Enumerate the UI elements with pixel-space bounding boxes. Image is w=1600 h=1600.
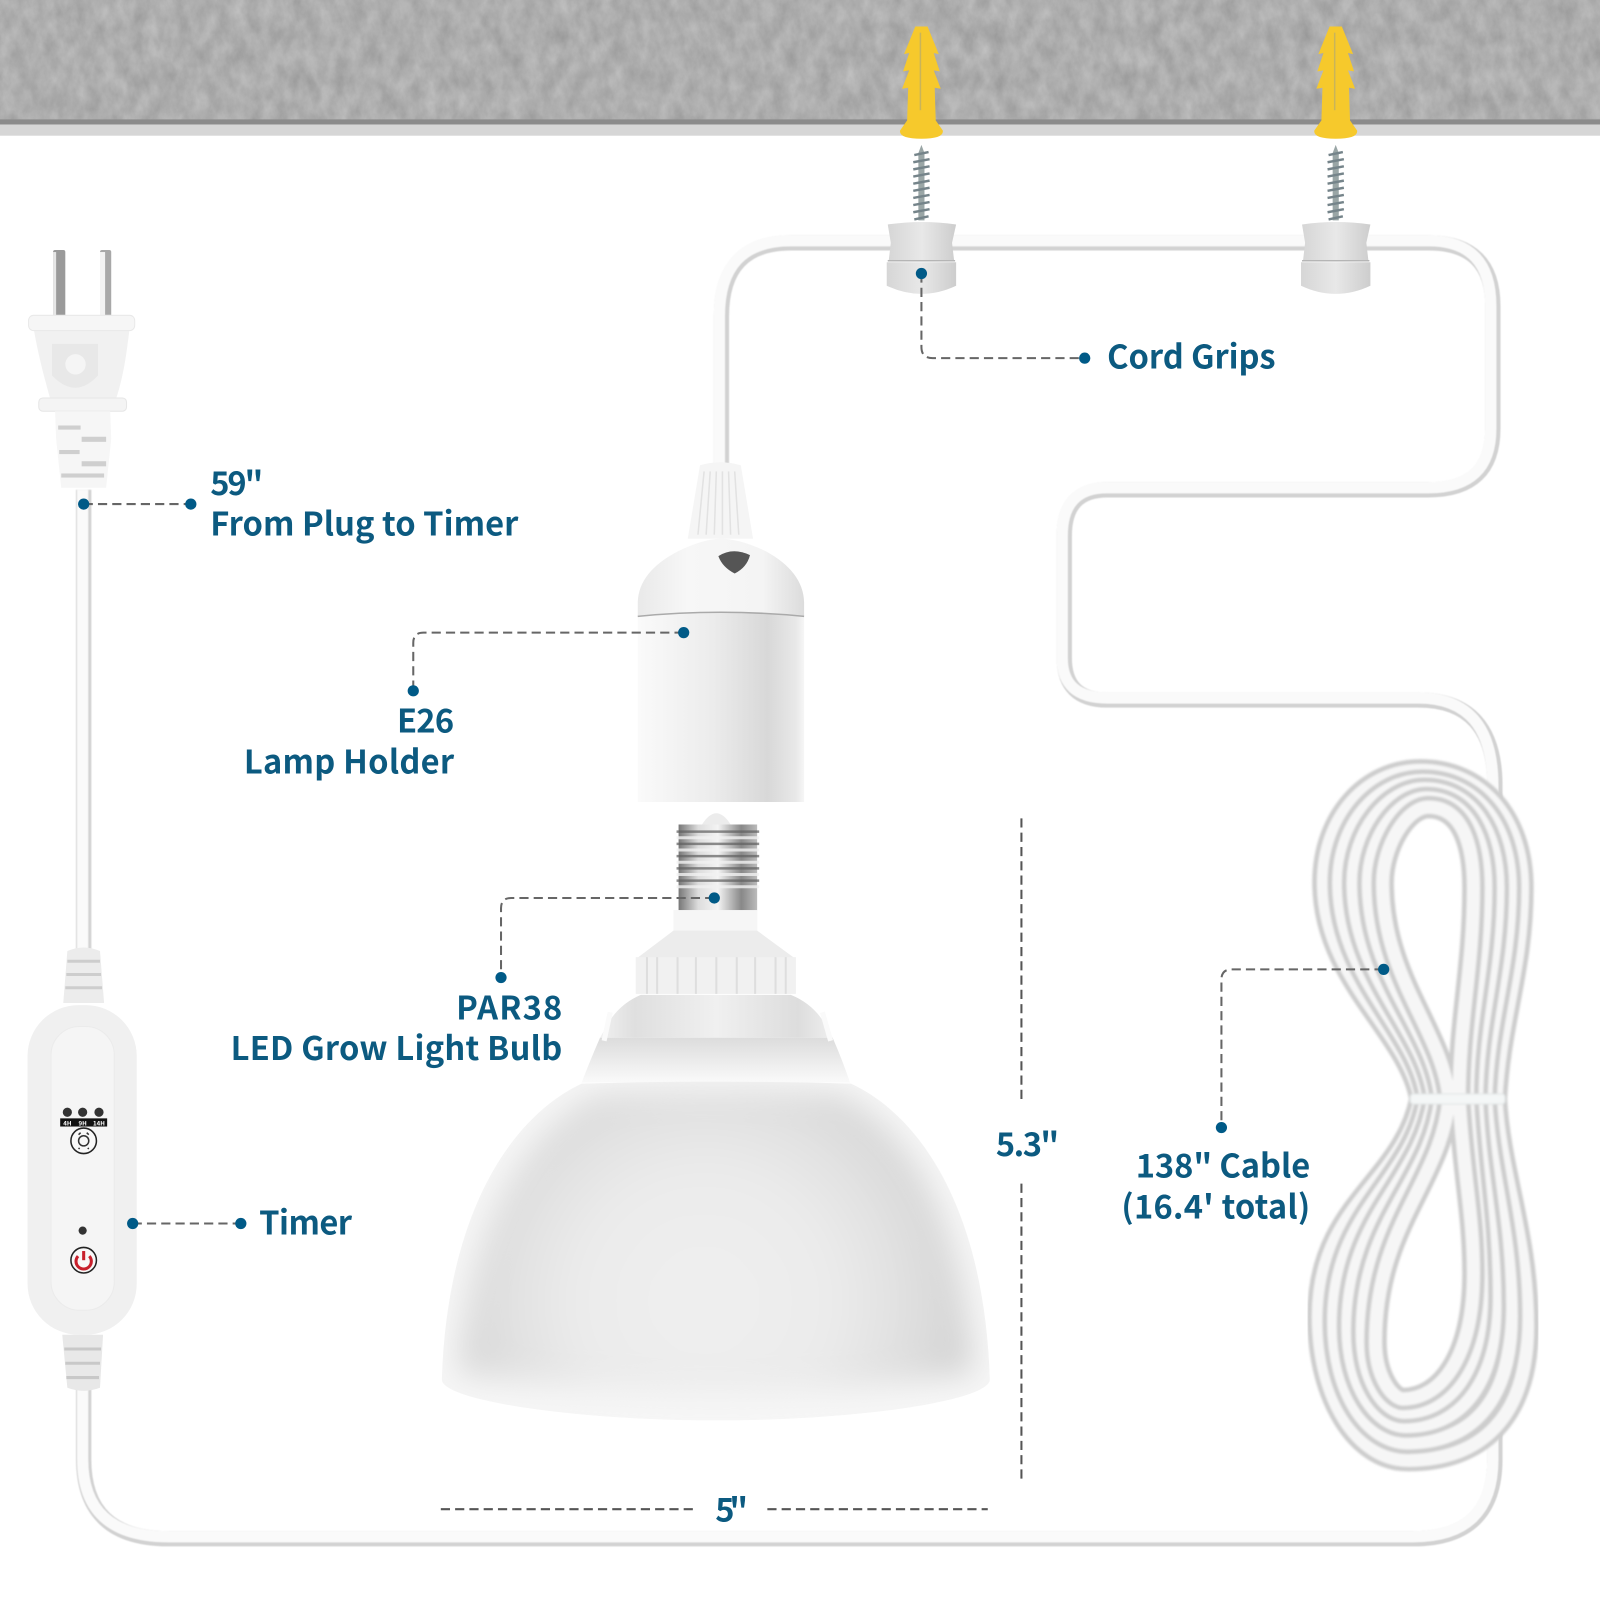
callout: from plug to timer: [78, 458, 519, 546]
lamp holder: [638, 462, 804, 802]
callout: E26 lamp holder: E26: [397, 696, 454, 743]
callout: timer: [127, 1198, 353, 1245]
callout: E26 lamp holder: Lamp Holder: [244, 736, 455, 783]
screw base: [677, 824, 759, 910]
timer hour labels: 14H: [93, 1119, 105, 1128]
coiled cable bundle: [1318, 770, 1528, 1460]
timer hour labels: 4H: [63, 1119, 72, 1128]
cord grip: left: [887, 222, 956, 294]
callout: cable length: [1121, 964, 1389, 1228]
collar: [636, 910, 796, 959]
timer strain relief: bottom: [62, 1335, 103, 1391]
wall anchor and screw: left: [900, 27, 943, 220]
power plug: [29, 250, 135, 488]
callout: from plug to timer: 59": [210, 458, 263, 505]
callout: cable length: (16.4' total): [1121, 1181, 1310, 1228]
callout: cable length: 138" Cable: [1136, 1141, 1310, 1188]
callout: timer: Timer: [259, 1198, 353, 1245]
cable hole: [718, 551, 750, 573]
timer hour labels: 9H: [79, 1119, 87, 1128]
ceiling: [0, 0, 1600, 136]
callout: cord grips: Cord Grips: [1107, 331, 1276, 378]
dimension: bulb height: 5.3": [996, 1119, 1059, 1166]
holder cap: [638, 539, 804, 616]
cord grip: right: [1301, 222, 1370, 294]
icon: power button: [71, 1247, 96, 1273]
LED bulb: [442, 813, 990, 1420]
bulb neck: [582, 995, 850, 1083]
callout: PAR38 bulb: PAR38: [456, 982, 562, 1029]
timer hour labels: [60, 1118, 107, 1128]
plug prongs: [53, 250, 111, 317]
timer controller: [28, 1005, 137, 1335]
timer strain relief: top: [63, 947, 104, 1003]
bulb dome: [442, 1082, 990, 1420]
strain relief cone: [688, 462, 753, 539]
main cable: plug to timer to bottom to coil: [83, 490, 1495, 1539]
upper cable routing: coil to lamp holder: [719, 241, 1495, 816]
timer indicator dots: [63, 1108, 104, 1117]
callout: cord grips: [916, 268, 1276, 378]
bulb tip: [702, 813, 731, 824]
callout: E26 lamp holder: [244, 627, 689, 783]
dimension: bulb width: 5": [715, 1484, 748, 1531]
ribbed ring: [636, 957, 796, 994]
callout: PAR38 bulb: [231, 892, 720, 1070]
callout: PAR38 bulb: LED Grow Light Bulb: [231, 1023, 562, 1070]
callout: from plug to timer: From Plug to Timer: [210, 499, 519, 546]
holder body: [638, 612, 804, 802]
icon: clock button: [71, 1128, 96, 1154]
wall anchor and screw: right: [1314, 27, 1357, 220]
status LED: [79, 1227, 87, 1235]
